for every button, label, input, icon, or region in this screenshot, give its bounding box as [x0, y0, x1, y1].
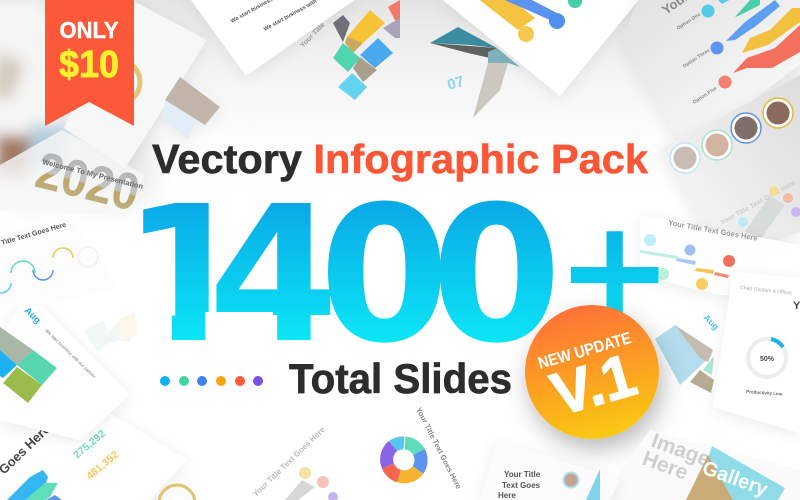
cycle chart	[387, 443, 421, 477]
bar: green	[735, 0, 760, 17]
tile: teal	[17, 350, 57, 385]
ribbon: only $10	[45, 0, 134, 126]
icon: yellow node	[518, 26, 534, 42]
slide title: Your Title	[299, 22, 326, 49]
slide title: Here	[498, 491, 516, 500]
mosaic tile: photo	[353, 57, 377, 82]
heading Aug: Aug	[22, 305, 43, 326]
slide title: Your Title Text Goes Here	[720, 180, 797, 227]
avatar	[564, 472, 578, 488]
2020 numerals: 2020	[30, 141, 145, 223]
image tile: water	[655, 325, 712, 385]
option labels: Option One	[676, 12, 702, 32]
slide title: Text Goes	[502, 481, 541, 490]
icon: option node red	[718, 76, 732, 88]
subtitle: Total Slides	[289, 355, 512, 402]
mosaic tile: blue	[360, 38, 393, 68]
panel: arrow image slide	[430, 27, 520, 118]
slide title: Welcome To My Presentation	[42, 157, 145, 191]
panel: blurred slide at far left	[0, 0, 110, 190]
price: $10	[59, 44, 119, 86]
mosaic tile: teal	[333, 43, 360, 72]
panel: image gallery slide	[600, 429, 800, 500]
panel: avatars slide	[660, 75, 800, 262]
badge: new update v.1	[525, 305, 659, 439]
tile: blue	[0, 350, 17, 378]
panel: 2020 welcome slide	[0, 130, 145, 223]
panel: slide with ring and image	[64, 0, 220, 168]
arrow image	[430, 27, 497, 48]
icon: blue node	[549, 13, 565, 29]
yellow bar	[477, 0, 535, 30]
icon: option node blue	[710, 42, 724, 54]
text: gallery: Gallery	[699, 457, 771, 500]
node: yellow	[299, 467, 311, 479]
blue bar	[500, 0, 557, 20]
node: pink	[317, 476, 329, 488]
avatar: green ring	[702, 130, 732, 160]
panel: arcs slide, left	[0, 215, 118, 306]
panel: top white slide with text	[188, 0, 360, 76]
number 07: 07	[445, 73, 466, 94]
mosaic tile: photo	[345, 37, 363, 53]
image tile: teal	[703, 356, 714, 375]
image: lake	[0, 327, 33, 365]
big number: 1400	[122, 166, 562, 385]
bar: red	[733, 25, 800, 73]
slide title: Your Title	[504, 470, 541, 479]
avatar: teal ring	[670, 143, 700, 173]
photo	[285, 480, 315, 500]
slide heading: Chart (Dodani & Office)	[740, 285, 792, 296]
mosaic tile: light blue	[338, 73, 367, 100]
blue tile	[163, 100, 195, 140]
panel: timeline slide	[640, 215, 800, 295]
triangle tile	[586, 469, 600, 500]
number: 275,292	[71, 428, 108, 461]
image tile	[165, 77, 220, 125]
icons: timeline nodes	[644, 234, 735, 290]
panel: image gallery slide: Here	[639, 447, 691, 485]
layered shapes	[7, 470, 62, 500]
panel: bottom left slide with numbers	[0, 395, 195, 500]
image tile: photo	[690, 370, 714, 393]
caption: Productivity Line	[746, 389, 783, 397]
panel: top right slide with options: Option Five	[692, 86, 718, 106]
panel: Aug slide, lower left	[0, 292, 130, 440]
panel: process slide, bottom	[251, 425, 338, 500]
ring chart: 50%	[760, 356, 775, 363]
slide title: Your Title Text Goes Here	[668, 218, 758, 243]
panel: top right slide with options	[620, 0, 800, 152]
circle	[525, 305, 659, 439]
avatar: blue ring	[731, 113, 761, 143]
icon: option node teal	[702, 4, 714, 18]
label: v.1: V.1	[544, 341, 643, 428]
slide title: Your Title Text Goes Here	[414, 406, 463, 491]
slide title: Your Title Text Goes Here	[251, 425, 327, 498]
panel: cycle chart slide	[387, 406, 463, 491]
bar: teal	[716, 0, 733, 4]
mosaic tile: dark photo	[333, 15, 350, 42]
avatar: yellow ring	[763, 98, 793, 128]
bar: yellow	[742, 8, 800, 53]
bar: blue	[726, 0, 780, 41]
panel: faded puzzle slide	[83, 312, 137, 352]
teal tile	[695, 446, 785, 500]
title: Vectory Infographic Pack	[152, 136, 648, 182]
mosaic tile: yellow	[347, 10, 385, 43]
panel: chart slide	[713, 272, 800, 433]
foot of digit one masked	[120, 312, 172, 344]
slide title: Title Text Goes Here	[1, 222, 67, 247]
ribbon shape	[45, 0, 134, 126]
image tile: photo	[675, 325, 713, 362]
color dots	[160, 376, 263, 386]
heading Aug: Aug	[702, 312, 721, 332]
panel: mosaic slide	[299, 0, 400, 100]
slide text: We start business with our partner	[44, 328, 97, 379]
label: new update: NEW UPDATE	[536, 329, 633, 373]
panel: profile slide, bottom centre	[480, 440, 620, 500]
panel: map route slide	[720, 180, 800, 240]
small ring	[159, 485, 195, 500]
panel: Aug image slide	[655, 312, 721, 393]
photo tile	[686, 455, 733, 500]
text: image here: Image	[648, 429, 713, 471]
big number: +	[556, 190, 673, 353]
image: butterfly	[3, 367, 42, 403]
slide background	[600, 430, 800, 500]
timeline bars	[640, 250, 729, 278]
panel: top white slide with 3D bars	[438, 0, 642, 96]
route nodes	[738, 186, 800, 227]
ring chart	[748, 339, 786, 377]
number: 481,352	[84, 449, 121, 482]
node: lilac	[328, 492, 338, 500]
mosaic tile: red	[388, 0, 400, 25]
icon: teal node	[568, 0, 582, 8]
mosaic tile: pink photo	[383, 18, 400, 38]
arc steps	[0, 247, 98, 293]
label: only: ONLY	[60, 17, 118, 43]
icon: yellow ring	[96, 60, 140, 104]
panel: top right slide with options: Option Three	[682, 48, 711, 70]
